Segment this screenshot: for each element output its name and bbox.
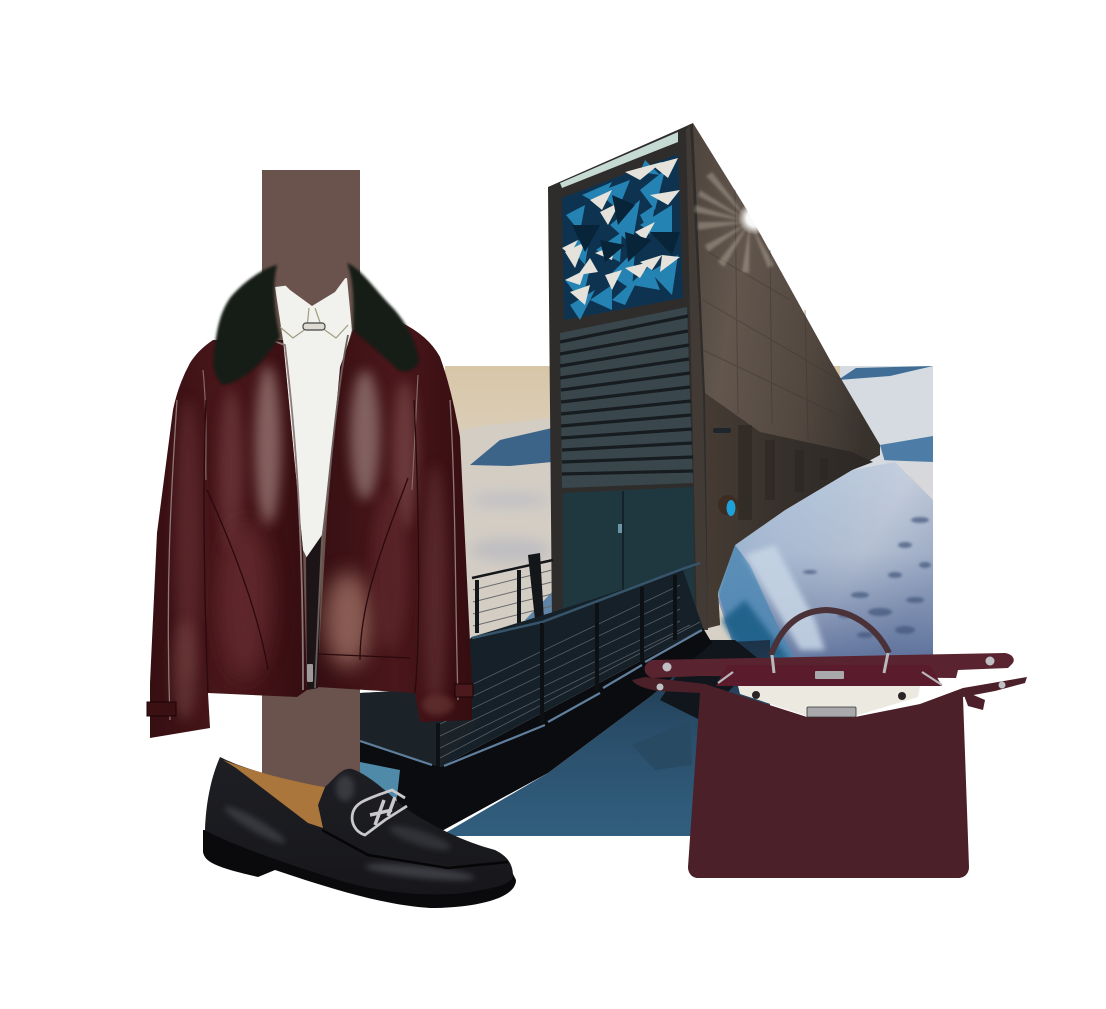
piping — [168, 400, 177, 720]
handle — [771, 610, 889, 655]
side wall — [693, 123, 880, 630]
handbag — [632, 610, 1027, 878]
seams — [204, 400, 419, 693]
door — [563, 487, 695, 630]
snow bank — [718, 462, 933, 662]
photo: snowy landscape — [440, 366, 933, 836]
building: seed vault — [548, 123, 880, 630]
mosaic panel — [562, 154, 683, 320]
jacket — [147, 255, 473, 738]
deck — [360, 570, 703, 767]
upper — [205, 757, 513, 894]
cables — [440, 585, 700, 758]
neck opening — [279, 255, 346, 306]
sole — [203, 830, 516, 908]
wall lamp — [713, 428, 731, 433]
side tab — [962, 690, 985, 710]
zipper — [271, 335, 348, 690]
far railing — [473, 570, 552, 626]
brown vertical bar — [262, 170, 360, 790]
lower wall — [700, 393, 873, 630]
buckle — [352, 790, 407, 835]
porthole — [718, 495, 738, 516]
cuffs — [147, 684, 473, 716]
shine — [222, 775, 475, 884]
hardware — [656, 653, 1006, 717]
body — [632, 677, 1027, 878]
collage — [146, 123, 1027, 908]
upper strap — [645, 653, 1014, 678]
white interior — [738, 686, 920, 716]
leather highlights — [168, 365, 458, 720]
inner dark gap — [306, 535, 322, 690]
leather body — [150, 340, 307, 738]
wall panel joints — [703, 190, 860, 440]
near rail — [472, 563, 700, 638]
shirt — [275, 278, 352, 560]
snow block — [360, 762, 400, 800]
insole — [223, 760, 325, 828]
deck ledge — [360, 630, 702, 766]
inner band — [716, 665, 942, 686]
front frame — [548, 123, 708, 630]
viewing platform and railings — [360, 553, 712, 838]
shirt collar — [280, 308, 348, 338]
apron stitching — [322, 830, 508, 868]
lower snow floor — [440, 640, 770, 836]
sunburst — [694, 172, 800, 300]
loafer — [203, 757, 516, 908]
fur collar — [213, 263, 419, 385]
skylight strip — [560, 132, 678, 188]
louvers — [560, 307, 693, 488]
platform base — [360, 628, 712, 838]
